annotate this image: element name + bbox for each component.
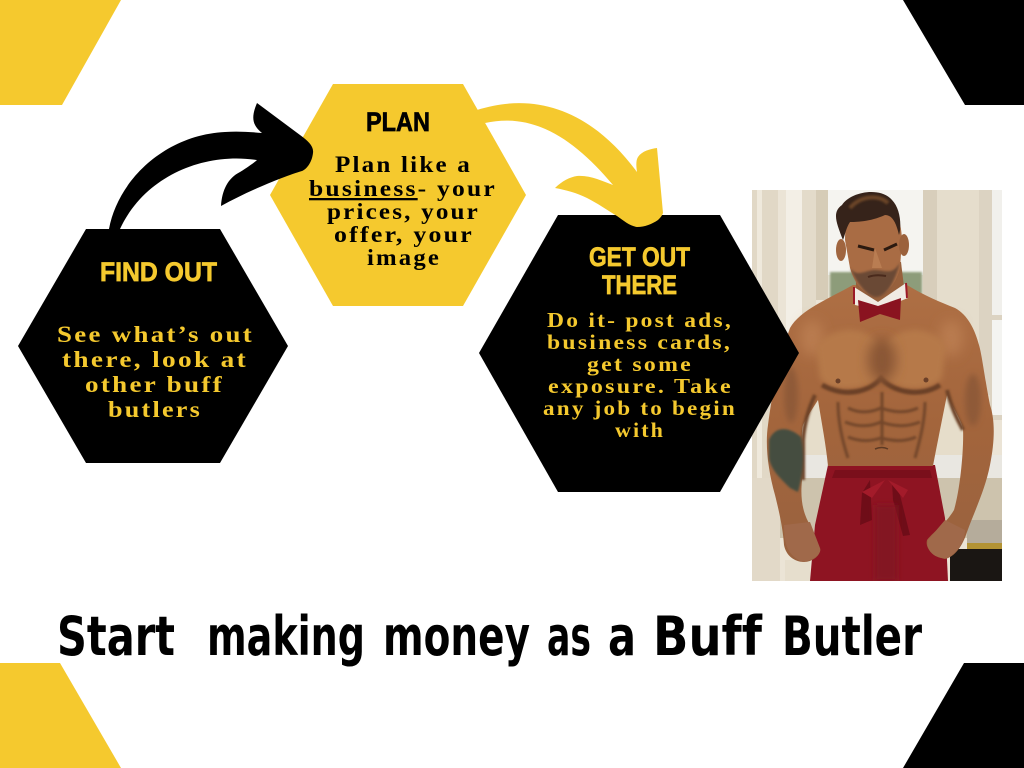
torso and arms (767, 285, 994, 562)
text: get out there description: get some (587, 352, 693, 376)
heading: plan: PLAN (366, 107, 430, 137)
tattoo (769, 429, 803, 492)
photo: butler in red apron (752, 190, 1002, 581)
text: find out description: See what’s out (57, 322, 254, 348)
heading: find out: FIND OUT (100, 257, 217, 287)
corner: top-right black (903, 0, 1024, 105)
hair (836, 192, 900, 240)
arm shadows (803, 395, 815, 480)
text: get out there description: Do it- post ads, (547, 308, 733, 332)
text: get out there description: with (615, 418, 665, 442)
corner: bottom-right black (903, 663, 1024, 768)
arrow: plan to get out there (477, 103, 663, 227)
title (57, 605, 922, 668)
text: plan description (309, 152, 497, 270)
text: plan description: prices, your (327, 199, 480, 224)
hands (784, 522, 820, 562)
heading: get out there: THERE (602, 270, 677, 300)
heading: get out there (589, 242, 690, 300)
text: find out description: there, look at (62, 347, 248, 373)
heading: get out there: GET OUT (589, 242, 690, 272)
text: plan description: Plan like a (335, 152, 472, 177)
text: plan description: image (367, 245, 441, 270)
title: making (207, 605, 365, 668)
apron (810, 465, 948, 581)
abs (838, 392, 925, 458)
title: Butler (782, 605, 922, 668)
title: money (383, 605, 530, 668)
neck and head (856, 262, 905, 302)
hexagon: get out there (479, 215, 799, 492)
text: get out there description (543, 308, 737, 442)
title: as (547, 605, 591, 668)
text: get out there description: business cards, (547, 330, 732, 354)
corner: top-left yellow (0, 0, 121, 105)
hexagon: plan (270, 84, 526, 306)
text: find out description (57, 322, 254, 423)
text: get out there description: exposure. Take (548, 374, 733, 398)
corner: bottom-left yellow (0, 663, 121, 768)
text: plan description: business - your (309, 176, 497, 201)
text: get out there description: any job to begin (543, 396, 737, 420)
title: a (608, 605, 636, 668)
title: Start (57, 605, 175, 668)
text: find out description: other buff (85, 372, 224, 398)
collar and bow tie (854, 283, 908, 322)
arrow: find out to plan (109, 103, 313, 229)
text: plan description: offer, your (334, 222, 474, 247)
pecs (818, 330, 875, 388)
text: find out description: butlers (108, 397, 202, 423)
hexagon: find out (18, 229, 288, 463)
title: Buff (653, 605, 762, 668)
